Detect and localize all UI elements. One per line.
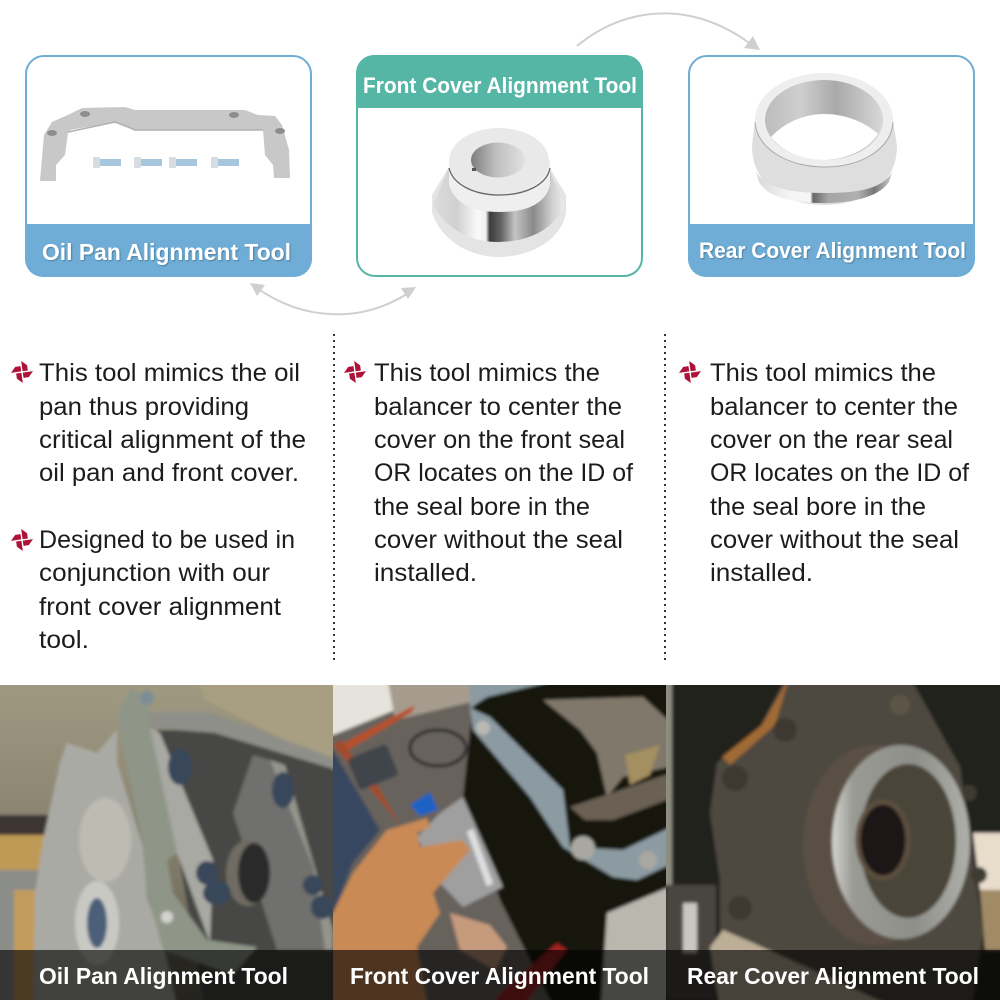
bullet text: rear seal: OR locates on the ID of (710, 459, 969, 487)
icon: pinwheel bullet (678, 360, 702, 384)
icon: pinwheel bullet (343, 360, 367, 384)
panel: front cover alignment tool (356, 55, 643, 276)
caption band (356, 55, 643, 108)
bullet text: mimics the oil pan: critical alignment of the (39, 426, 306, 454)
panel: rear cover alignment tool (688, 56, 975, 277)
caption text: Rear Cover Alignment Tool (699, 238, 966, 263)
caption band (688, 224, 975, 277)
bullet text: front seal: This tool mimics the (374, 359, 600, 387)
bullet text: front seal: balancer to center the (374, 393, 622, 421)
arrow: front cover to rear cover (577, 13, 760, 50)
bullet text: designed for conjunction: front cover alignment (39, 593, 281, 621)
bullet text: front seal: cover without the seal (374, 526, 623, 554)
bullet text: rear seal: This tool mimics the (710, 359, 936, 387)
photo: rear cover tool on engine (666, 685, 1000, 1000)
caption bar: rear cover photo: Rear Cover Alignment Tool (687, 963, 979, 989)
bullet text: front seal: the seal bore in the (374, 493, 590, 521)
panel: oil pan alignment tool (25, 56, 312, 277)
arrow: oil pan and front cover double-headed (250, 283, 416, 314)
icon: pinwheel bullet (10, 360, 34, 384)
bullet text: rear seal: balancer to center the (710, 393, 958, 421)
text column: rear cover tool (678, 359, 969, 587)
caption bar: oil pan photo (0, 950, 333, 1000)
bullet text: rear seal: cover without the seal (710, 526, 959, 554)
bullet text: rear seal: cover on the rear seal (710, 426, 953, 454)
bullet text: mimics the oil pan: oil pan and front cover. (39, 459, 299, 487)
caption bar: front cover photo: Front Cover Alignment Tool (350, 963, 649, 989)
caption text: Oil Pan Alignment Tool (42, 239, 291, 265)
product photo: rear cover ring (752, 73, 897, 205)
bullet text: front seal: OR locates on the ID of (374, 459, 633, 487)
bullet text: rear seal: the seal bore in the (710, 493, 926, 521)
bullet text: front seal: installed. (374, 559, 477, 587)
text column: oil pan tool (10, 359, 306, 654)
caption bar: rear cover photo (666, 950, 1000, 1000)
bullet text: front seal: cover on the front seal (374, 426, 625, 454)
product photo: front cover cone (432, 128, 566, 257)
caption band (25, 224, 312, 277)
caption bar: oil pan photo: Oil Pan Alignment Tool (39, 963, 288, 989)
bullet text: designed for conjunction: conjunction with our (39, 559, 270, 587)
product photo: oil pan bracket and bolts (40, 107, 290, 181)
photo: oil pan tool installed on engine block (0, 685, 333, 1000)
bullet text: designed for conjunction: Designed to be used in (39, 526, 295, 554)
bullet text: designed for conjunction: tool. (39, 626, 89, 654)
bullet text: rear seal: installed. (710, 559, 813, 587)
bullet text: mimics the oil pan: This tool mimics the oil (39, 359, 300, 387)
caption text: Front Cover Alignment Tool (363, 73, 637, 98)
icon: pinwheel bullet (10, 528, 34, 552)
text column: front cover tool (343, 359, 633, 587)
caption bar: front cover photo (333, 950, 666, 1000)
photo: front cover tool held in hand (333, 685, 666, 1000)
bullet text: mimics the oil pan: pan thus providing (39, 393, 249, 421)
